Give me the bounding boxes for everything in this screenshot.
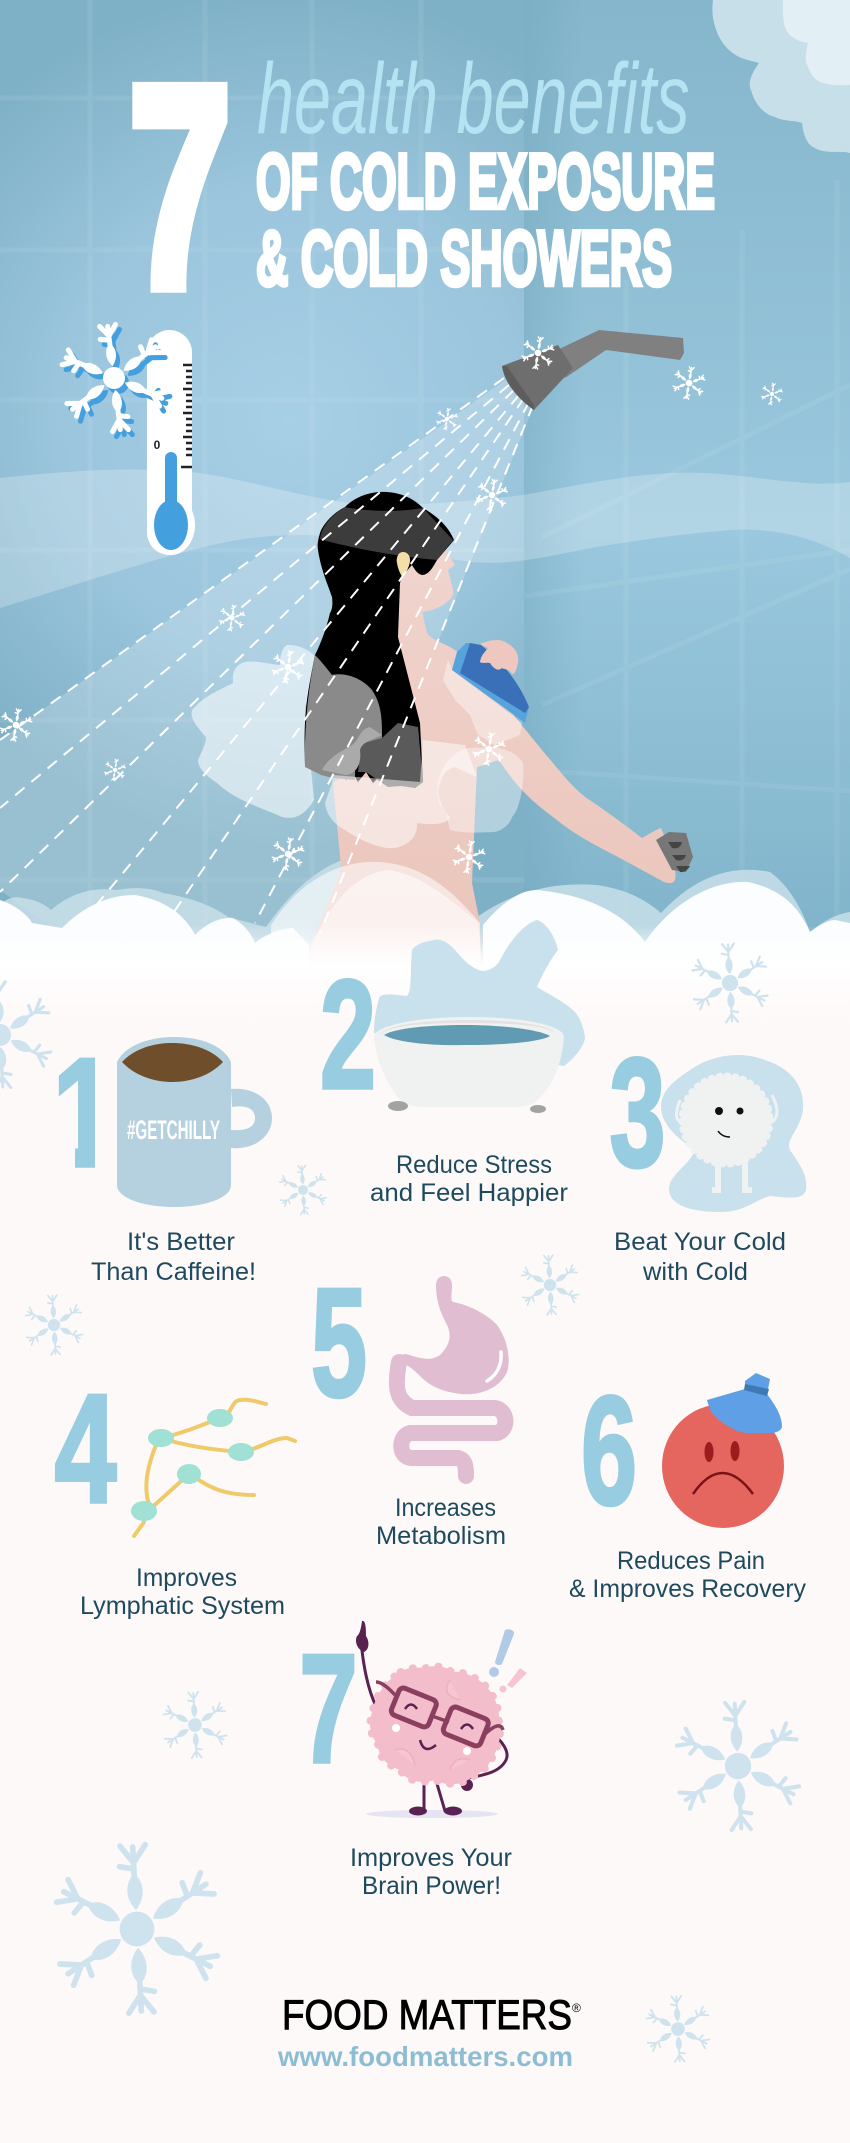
caption 4 (80, 1564, 285, 1620)
item 2: bath (320, 920, 585, 1207)
item 1: coffee (52, 1027, 272, 1286)
foam clouds (0, 862, 850, 1000)
icon: mug: #GETCHILLY (127, 1115, 220, 1145)
icon: germ in cloud (661, 1055, 806, 1212)
title (129, 28, 715, 346)
big seven: 7 (129, 28, 231, 346)
caption 7 (350, 1844, 512, 1900)
number 2: 2 (320, 948, 376, 1121)
cloud top right (712, 0, 850, 153)
caption 5: Metabolism (376, 1522, 506, 1550)
woman in shower (192, 492, 693, 990)
caption 5: Increases (395, 1494, 496, 1522)
body and arm (309, 550, 676, 990)
number 5: 5 (311, 1256, 367, 1429)
number 7: 7 (299, 1623, 358, 1796)
background: shower wall (0, 0, 850, 992)
foam fade (0, 925, 850, 967)
icon: snowflake on thermometer (58, 319, 174, 442)
item 3: beat a cold (609, 1026, 806, 1286)
script subtitle: health benefits (257, 42, 690, 154)
caption 6: & Improves Recovery (569, 1575, 806, 1603)
water spray lines (0, 378, 533, 933)
icon: bath with splash (374, 920, 585, 1113)
number 3: 3 (609, 1026, 666, 1199)
hair band (320, 507, 453, 560)
item 4: lymphatic (54, 1362, 295, 1620)
caption 1: It's Better (127, 1228, 235, 1256)
caption 1: Than Caffeine! (91, 1258, 256, 1286)
soap foam on back (325, 740, 477, 848)
caption 6: Reduces Pain (617, 1547, 765, 1575)
logo: Food Matters: FOOD MATTERS (282, 1991, 572, 2038)
icon: stomach and intestine (394, 1276, 509, 1476)
icon: lymph nodes (131, 1400, 295, 1536)
caption 6 (569, 1547, 806, 1603)
caption 2 (370, 1151, 568, 1207)
thermometer (147, 330, 195, 555)
item 7: brain (299, 1621, 527, 1900)
caption 5 (376, 1494, 506, 1550)
caption 7: Improves Your (350, 1844, 512, 1872)
website url: www.foodmatters.com (277, 2041, 573, 2072)
caption 3 (614, 1228, 786, 1286)
item 6: pain (569, 1364, 806, 1603)
caption 2: Reduce Stress (396, 1151, 552, 1179)
caption 4: Improves (136, 1564, 237, 1592)
caption 1 (91, 1228, 256, 1286)
number 1: 1 (52, 1027, 117, 1200)
number 4: 4 (54, 1362, 117, 1535)
icon: mug (117, 1037, 272, 1207)
caption 2: and Feel Happier (370, 1179, 568, 1207)
wet hair grey (305, 655, 382, 780)
caption 3: Beat Your Cold (614, 1228, 786, 1256)
shower head (502, 330, 684, 410)
sponge and hand (452, 640, 529, 723)
white snowflakes in spray (0, 335, 784, 875)
caption 7: Brain Power! (362, 1872, 501, 1900)
lower page background (0, 965, 850, 2143)
shower spray beam (0, 380, 533, 933)
caption 4: Lymphatic System (80, 1592, 285, 1620)
icon: brain character (356, 1621, 527, 1818)
pale snowflakes (0, 942, 802, 2063)
thermometer: 0 (154, 438, 161, 452)
item 5: metabolism (311, 1256, 509, 1550)
soap foam right (437, 747, 523, 833)
icon: sad face with ice pack (662, 1373, 784, 1528)
caption 3: with Cold (642, 1258, 748, 1286)
number 6: 6 (581, 1364, 637, 1537)
wave band (0, 470, 850, 608)
back foam (0, 855, 850, 1000)
ear (397, 552, 410, 578)
soap foam left (192, 645, 320, 818)
hair (305, 492, 454, 788)
loofah in hand (656, 832, 693, 872)
soap under sponge (443, 660, 522, 745)
logo: Food Matters: ® (572, 2001, 581, 2015)
